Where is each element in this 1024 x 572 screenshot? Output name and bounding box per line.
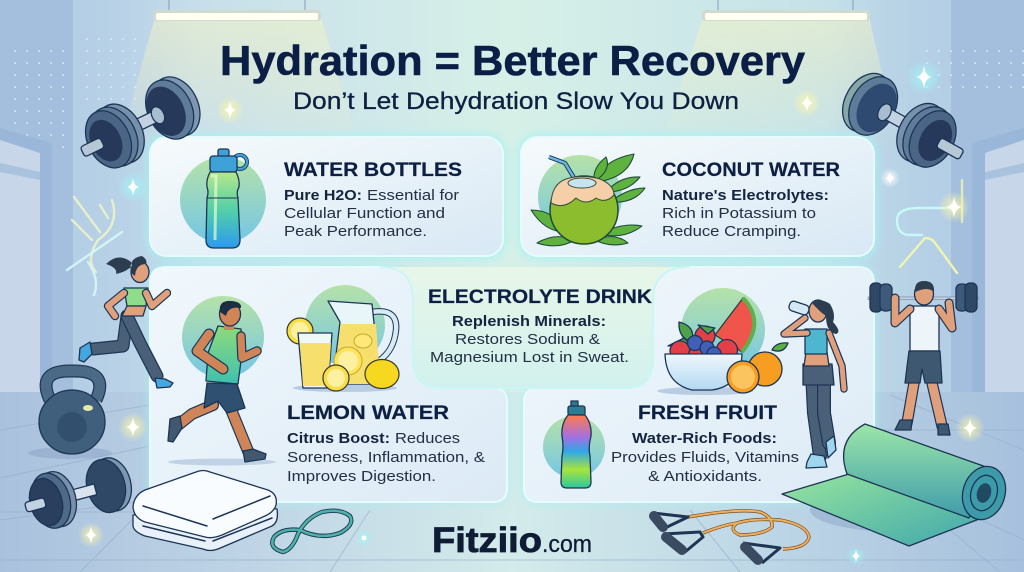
text: lemon water description: Improves Digestion. — [287, 469, 436, 485]
icon: dumbbell top left — [69, 69, 209, 180]
figure: woman drinking — [784, 300, 844, 468]
text: lemon water description — [287, 431, 485, 485]
text: fresh fruit description — [611, 431, 799, 485]
logo: Fitziio.com: Fitziio — [432, 521, 542, 560]
icon: dumbbell top right — [833, 65, 977, 182]
text: coconut water description — [662, 188, 829, 240]
text: fresh fruit description: Provides Fluids, Vitamins — [611, 450, 799, 466]
text: lemon water description: Soreness, Inflammation, & — [287, 450, 485, 466]
heading: fresh fruit: FRESH FRUIT — [638, 402, 777, 424]
text: water bottles description: Peak Performance. — [284, 224, 427, 240]
icon: kettlebell — [28, 371, 112, 459]
icon: dumbbell lower left — [19, 452, 137, 535]
heading: coconut water: COCONUT WATER — [662, 159, 840, 181]
icon: sports drink bottle — [543, 401, 605, 488]
icon: looped resistance band — [272, 511, 351, 552]
panel: lemon water — [150, 267, 507, 502]
figure: male runner — [168, 296, 276, 466]
neon accent right — [897, 180, 962, 273]
icon: coconut — [531, 154, 645, 246]
text: electrolyte drink description: Replenish Minerals: — [452, 314, 606, 330]
panel: water bottles — [148, 135, 505, 258]
text: water bottles description: Cellular Function and — [284, 206, 445, 222]
text: lemon water description: Citrus Boost: — [287, 431, 390, 447]
text: coconut water description: Nature's Electrolytes: — [662, 188, 829, 204]
heading: lemon water: LEMON WATER — [287, 402, 449, 424]
text: electrolyte drink description: Restores Sodium & — [455, 332, 600, 348]
icon: fruit bowl — [657, 288, 788, 395]
icon: water bottle — [180, 149, 266, 248]
text: fresh fruit description: Water-Rich Foods: — [632, 431, 777, 447]
logo: Fitziio.com — [432, 521, 592, 560]
panel: fresh fruit — [524, 267, 874, 502]
icon: folded towels — [133, 470, 277, 550]
sparkles — [78, 59, 985, 566]
heading: electrolyte drink: ELECTROLYTE DRINK — [428, 286, 652, 308]
figure: female runner — [79, 256, 173, 388]
subtitle: Don’t Let Dehydration Slow You Down — [293, 88, 739, 115]
text: water bottles description: Pure H2O: — [284, 188, 362, 204]
heading: water bottles: WATER BOTTLES — [284, 159, 462, 181]
text: electrolyte drink description — [430, 314, 629, 366]
text: lemon water description: Reduces — [395, 431, 460, 447]
text: coconut water description: Reduce Cramping. — [662, 224, 801, 240]
panel: coconut water — [519, 135, 876, 258]
neon accent left — [67, 197, 122, 295]
text: coconut water description: Rich in Potassium to — [662, 206, 816, 222]
text: fresh fruit description: & Antioxidants. — [648, 469, 762, 485]
icon: resistance tube bands — [653, 511, 809, 563]
icon: lemon water pitcher — [287, 285, 399, 392]
icon: rolled yoga mat — [782, 424, 1012, 546]
logo: Fitziio.com: .com — [542, 531, 592, 558]
ceiling light left — [153, 0, 321, 21]
text: water bottles description — [284, 188, 459, 240]
ceiling light right — [702, 0, 870, 21]
text: water bottles description: Essential for — [367, 188, 459, 204]
text: electrolyte drink description: Magnesium Lost in Sweat. — [430, 350, 629, 366]
panel: electrolyte drink — [380, 267, 690, 388]
title: Hydration = Better Recovery — [220, 37, 806, 84]
figure: man lifting barbell — [868, 281, 978, 435]
